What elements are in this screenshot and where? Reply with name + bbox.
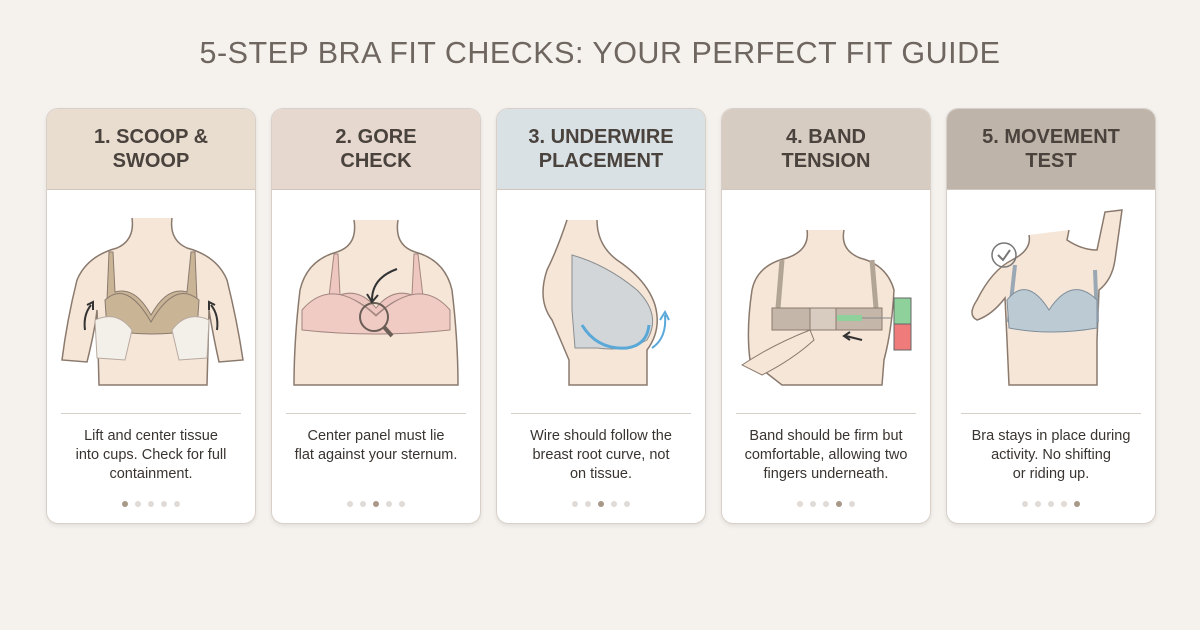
progress dots xyxy=(797,501,855,507)
heading: 2. GORE xyxy=(335,126,417,148)
description xyxy=(294,428,457,463)
progress dots xyxy=(572,501,630,507)
illustration: band xyxy=(741,230,912,386)
description: Wire should follow the xyxy=(530,428,672,444)
panel: scoop & swoop xyxy=(46,108,256,524)
description xyxy=(745,428,907,482)
icon: gauge xyxy=(894,298,911,350)
icon: check xyxy=(992,243,1016,267)
description: activity. No shifting xyxy=(991,447,1111,463)
description: or riding up. xyxy=(1013,466,1089,482)
panel: gore check xyxy=(271,108,481,524)
description: Bra stays in place during xyxy=(972,428,1130,444)
heading: TEST xyxy=(1025,150,1077,172)
icon: arrow xyxy=(652,315,665,348)
heading: 5. MOVEMENT xyxy=(982,126,1120,148)
heading: 1. SCOOP & xyxy=(94,126,208,148)
description: Lift and center tissue xyxy=(84,428,218,444)
heading: CHECK xyxy=(340,150,412,172)
description: into cups. Check for full xyxy=(76,447,226,463)
description xyxy=(76,428,226,482)
description: Band should be firm but xyxy=(749,428,903,444)
description: flat against your sternum. xyxy=(295,447,457,463)
heading: PLACEMENT xyxy=(539,150,663,172)
illustration: scoop xyxy=(61,218,244,386)
heading xyxy=(47,109,255,190)
heading: TENSION xyxy=(782,150,870,172)
icon: magnifier xyxy=(360,303,388,331)
heading xyxy=(722,109,930,190)
illustration: underwire xyxy=(542,220,670,386)
progress dots xyxy=(1022,501,1080,507)
description: containment. xyxy=(109,466,193,482)
title: 5-STEP BRA FIT CHECKS: YOUR PERFECT FIT GUIDE xyxy=(200,36,1000,70)
progress dots xyxy=(122,501,180,507)
description: comfortable, allowing two xyxy=(745,447,907,463)
description: Center panel must lie xyxy=(307,428,444,444)
heading: 3. UNDERWIRE xyxy=(528,126,674,148)
progress dots xyxy=(347,501,405,507)
icon: arrows xyxy=(85,305,91,330)
description: fingers underneath. xyxy=(764,466,888,482)
illustration: movement xyxy=(971,209,1123,386)
heading xyxy=(497,109,705,190)
heading xyxy=(272,109,480,190)
heading: SWOOP xyxy=(113,150,189,172)
heading: 4. BAND xyxy=(786,126,866,148)
description xyxy=(972,428,1130,482)
panel: band tension xyxy=(721,108,931,524)
description: breast root curve, not xyxy=(532,447,670,463)
heading xyxy=(947,109,1155,190)
description: on tissue. xyxy=(570,466,632,482)
panel: underwire xyxy=(496,108,706,524)
description xyxy=(530,428,672,482)
illustration: gore xyxy=(293,220,459,386)
panel: movement test xyxy=(946,108,1156,524)
